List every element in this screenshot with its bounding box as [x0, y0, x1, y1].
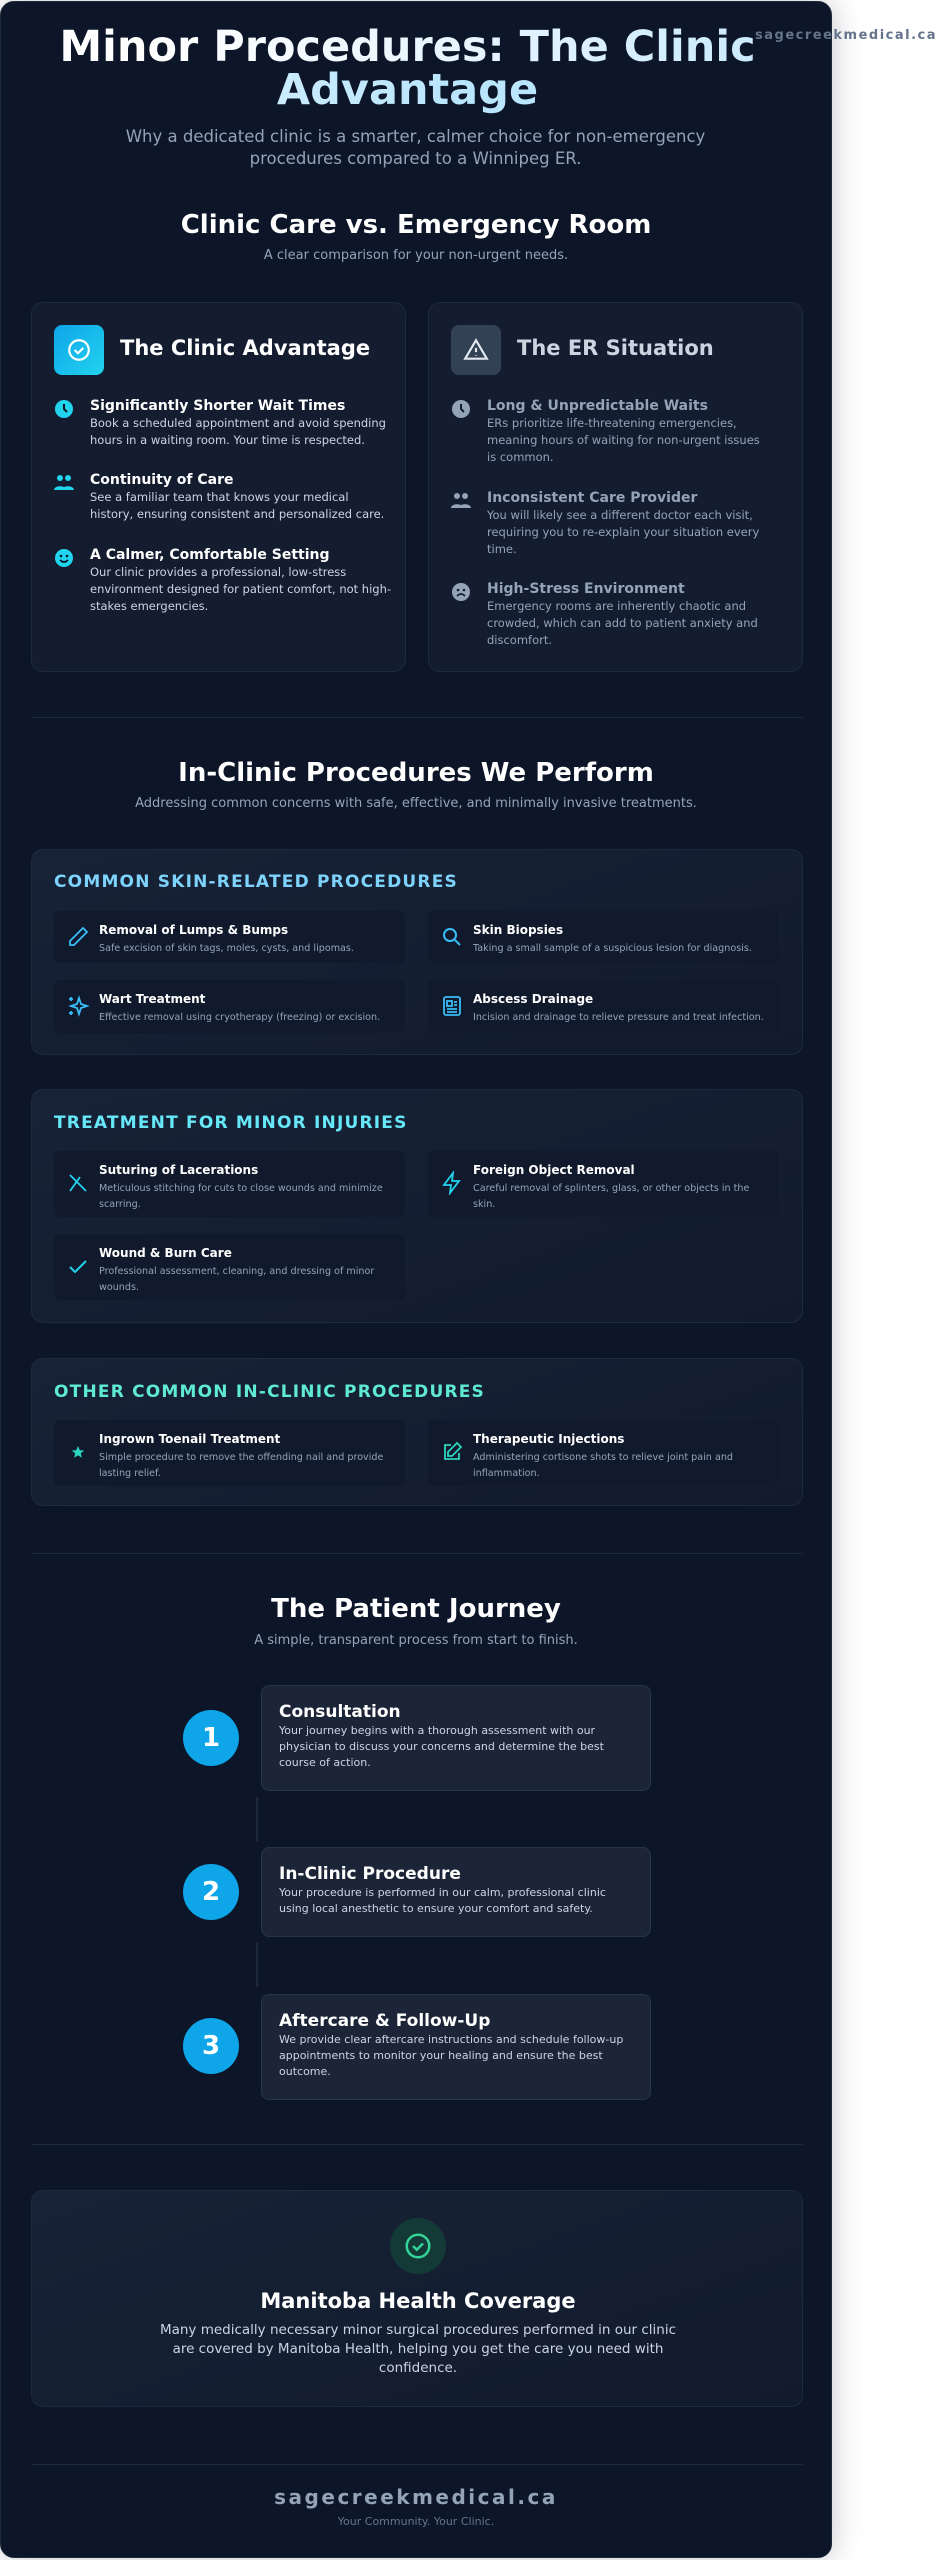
comparison subtitle: A clear comparison for your non-urgent needs.: [264, 248, 568, 263]
item: suturing: [54, 1151, 405, 1217]
item: lumps: Removal of Lumps & Bumps: [99, 923, 288, 937]
item: injections: Therapeutic Injections: [473, 1432, 624, 1446]
item: ingrown toenail: Ingrown Toenail Treatment: [99, 1432, 280, 1446]
step 1 number: [183, 1710, 239, 1766]
item: biopsies: Skin Biopsies: [473, 923, 563, 937]
item: lumps: [54, 911, 405, 963]
watermark: sagecreekmedical.ca: [755, 28, 937, 43]
item: abscess: Incision and drainage to relieve pressure and treat infection.: [473, 1012, 764, 1023]
item: ingrown toenail: [54, 1420, 405, 1486]
item: continuity: [54, 472, 384, 521]
item: long waits: [452, 398, 760, 464]
panel: clinic advantage: [31, 302, 406, 672]
item: long waits: ERs prioritize life-threatening emergencies, meaning hours of waiting for non-urgent issues is common.: [487, 416, 760, 464]
item: calmer setting: A Calmer, Comfortable Setting: [90, 547, 330, 563]
item: lumps: Safe excision of skin tags, moles, cysts, and lipomas.: [99, 943, 354, 954]
item: wound care: Professional assessment, cleaning, and dressing of minor wounds.: [99, 1266, 374, 1293]
step 2 card: Your procedure is performed in our calm, professional clinic using local anesthetic to ensure your comfort and safety.: [279, 1886, 606, 1915]
item: biopsies: [428, 911, 779, 963]
item: wart: Wart Treatment: [99, 992, 205, 1006]
step 1 card: Consultation: [279, 1702, 401, 1722]
step 1 number: 1: [202, 1723, 220, 1753]
item: continuity: See a familiar team that knows your medical: [90, 490, 349, 504]
item: high stress: High-Stress Environment: [487, 581, 685, 597]
step 3 number: 3: [202, 2031, 220, 2061]
panel: ER situation: [428, 302, 803, 672]
footer brand: sagecreekmedical.ca: [274, 2485, 558, 2509]
step 1 card: Your journey begins with a thorough assessment with our physician to discuss your concerns and determine the best course of action.: [279, 1724, 604, 1769]
item: calmer setting: [55, 547, 391, 613]
item: foreign object: Foreign Object Removal: [473, 1163, 635, 1177]
item: ingrown toenail: Simple procedure to remove the offending nail and provide lasting relief.: [99, 1452, 383, 1479]
item: wart: [54, 980, 405, 1033]
item: calmer setting: stakes emergencies.: [90, 599, 208, 613]
icon: warning: [451, 325, 501, 375]
heading: patient journey: The Patient Journey: [271, 1594, 561, 1624]
journey subtitle: A simple, transparent process from start to finish.: [254, 1633, 578, 1648]
item: wound care: Wound & Burn Care: [99, 1246, 232, 1260]
heading: skin: COMMON SKIN-RELATED PROCEDURES: [54, 872, 458, 892]
item: suturing: Suturing of Lacerations: [99, 1163, 258, 1177]
step 2 card: In-Clinic Procedure: [279, 1864, 461, 1884]
icon: check badge: [54, 325, 104, 375]
heading: other: OTHER COMMON IN-CLINIC PROCEDURES: [54, 1382, 485, 1402]
step 3 number: [183, 2018, 239, 2074]
item: foreign object: Careful removal of splinters, glass, or other objects in the skin.: [473, 1183, 749, 1210]
heading: ER situation: The ER Situation: [517, 336, 714, 360]
item: wait times: [55, 398, 386, 447]
title: Advantage: [277, 65, 538, 115]
heading: coverage: Manitoba Health Coverage: [260, 2289, 576, 2313]
item: continuity: history, ensuring consistent and personalized care.: [90, 507, 384, 521]
item: abscess: Abscess Drainage: [473, 992, 593, 1006]
subtitle: Why a dedicated clinic is a smarter, calmer choice for non-emergency procedures compared to a Winnipeg ER.: [126, 127, 705, 168]
item: inconsistent provider: You will likely see a different doctor each visit, requiring you to re-explain your situation every time.: [487, 508, 759, 556]
item: injections: Administering cortisone shots to relieve joint pain and inflammation.: [473, 1452, 733, 1479]
step 2 number: [183, 1864, 239, 1920]
title: [59, 22, 756, 115]
item: suturing: Meticulous stitching for cuts to close wounds and minimize scarring.: [99, 1183, 383, 1210]
footer tagline: Your Community. Your Clinic.: [338, 2515, 494, 2528]
panel: skin procedures: [31, 849, 803, 1055]
coverage text: Many medically necessary minor surgical procedures performed in our clinic are covered by Manitoba Health, helping you get the care you need with confidence.: [160, 2322, 676, 2376]
item: high stress: Emergency rooms are inherently chaotic and crowded, which can add to patient anxiety and discomfort.: [487, 599, 758, 647]
item: biopsies: Taking a small sample of a suspicious lesion for diagnosis.: [473, 943, 752, 954]
icon: shield check: [390, 2218, 446, 2274]
title: Minor Procedures: The Clinic: [59, 22, 756, 72]
procedures subtitle: Addressing common concerns with safe, effective, and minimally invasive treatments.: [135, 796, 697, 811]
item: wound care: [54, 1234, 405, 1300]
item: inconsistent provider: [451, 490, 759, 556]
item: calmer setting: Our clinic provides a professional, low-stress environment designed for patient comfort, not high-: [90, 565, 391, 596]
item: injections: [428, 1420, 779, 1486]
item: wart: Effective removal using cryotherapy (freezing) or excision.: [99, 1012, 380, 1023]
step 2 card: [261, 1847, 651, 1937]
panel: other procedures: [31, 1358, 803, 1506]
step 1 card: [261, 1685, 651, 1791]
heading: clinic advantage: The Clinic Advantage: [120, 336, 370, 360]
panel: minor injuries: [31, 1089, 803, 1323]
item: high stress: [452, 581, 758, 647]
item: inconsistent provider: Inconsistent Care Provider: [487, 490, 697, 506]
item: long waits: Long & Unpredictable Waits: [487, 398, 708, 414]
item: continuity: Continuity of Care: [90, 472, 233, 488]
step 3 card: [261, 1994, 651, 2100]
step 2 number: 2: [202, 1877, 220, 1907]
panel: health coverage: [31, 2190, 803, 2407]
item: wait times: Book a scheduled appointment and avoid spending hours in a waiting room. Your time is respected.: [90, 416, 386, 447]
heading: injuries: TREATMENT FOR MINOR INJURIES: [54, 1113, 408, 1133]
heading: comparison: Clinic Care vs. Emergency Room: [181, 210, 651, 240]
step 3 card: Aftercare & Follow-Up: [279, 2011, 490, 2031]
step 3 card: We provide clear aftercare instructions and schedule follow-up appointments to monitor your healing and ensure the best outcome.: [279, 2033, 623, 2078]
item: abscess: [428, 980, 779, 1033]
item: foreign object: [428, 1151, 779, 1217]
heading: procedures: In-Clinic Procedures We Perform: [178, 758, 654, 788]
item: wait times: Significantly Shorter Wait Times: [90, 398, 345, 414]
